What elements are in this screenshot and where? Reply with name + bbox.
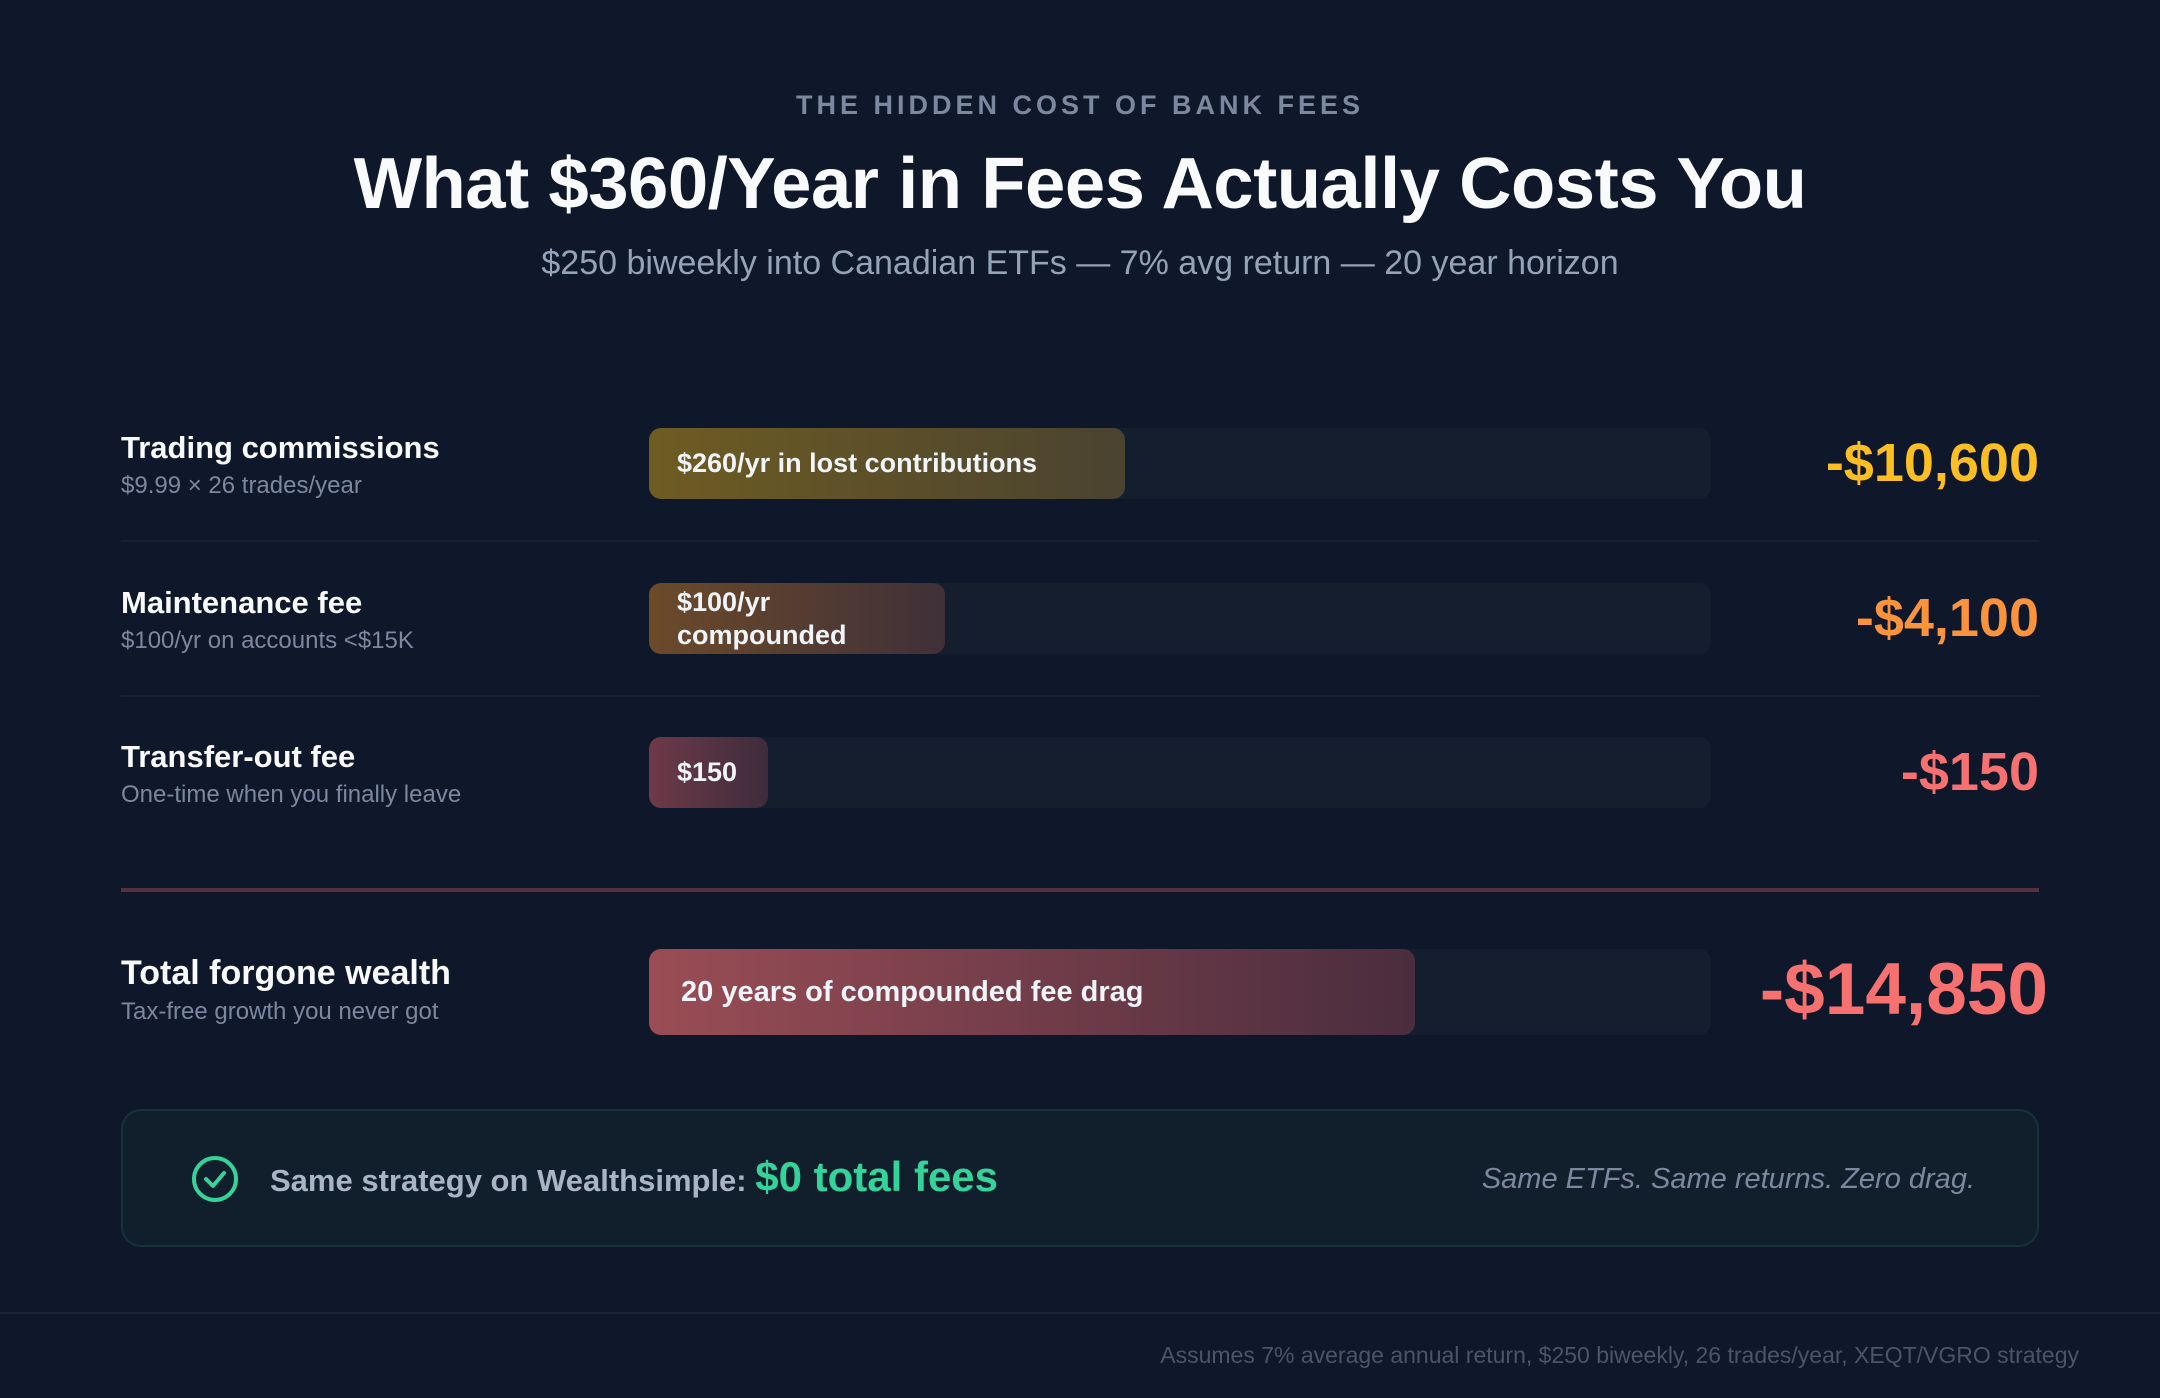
label: Transfer-out fee xyxy=(121,739,355,774)
callout: wealthsimple xyxy=(121,1109,2039,1247)
bar xyxy=(649,583,1711,654)
bar: compounded xyxy=(677,620,846,650)
callout text: Same strategy on Wealthsimple: $0 total fees xyxy=(270,1153,998,1200)
value: -$4,100 xyxy=(1856,588,2039,648)
row: total xyxy=(121,949,2048,1035)
sublabel: One-time when you finally leave xyxy=(121,781,461,808)
bar: $100/yr xyxy=(677,587,770,617)
sublabel: $100/yr on accounts <$15K xyxy=(121,627,414,654)
value: -$14,850 xyxy=(1760,949,2048,1030)
title: What $360/Year in Fees Actually Costs You xyxy=(354,143,1806,224)
tagline: Same ETFs. Same returns. Zero drag. xyxy=(1482,1163,1975,1195)
value: -$10,600 xyxy=(1826,433,2039,493)
sublabel: $9.99 × 26 trades/year xyxy=(121,472,362,499)
label: Total forgone wealth xyxy=(121,954,451,992)
label: Trading commissions xyxy=(121,430,440,465)
footnote: Assumes 7% average annual return, $250 biweekly, 26 trades/year, XEQT/VGRO strategy xyxy=(1160,1342,2079,1368)
subtitle: $250 biweekly into Canadian ETFs — 7% avg return — 20 year horizon xyxy=(541,244,1619,282)
label: Maintenance fee xyxy=(121,585,362,620)
icon: check xyxy=(192,1156,238,1202)
row: trading commissions xyxy=(121,428,2039,499)
sublabel: Tax-free growth you never got xyxy=(121,998,438,1025)
bar: 20 years of compounded fee drag xyxy=(681,976,1144,1008)
row: maintenance fee xyxy=(121,583,2039,654)
bar: $150 xyxy=(677,757,737,787)
eyebrow: THE HIDDEN COST OF BANK FEES xyxy=(796,90,1364,120)
row: transfer-out fee xyxy=(121,737,2039,808)
bar: $260/yr in lost contributions xyxy=(677,448,1037,478)
bar xyxy=(649,737,1711,808)
bar xyxy=(649,949,1711,1035)
bar xyxy=(649,428,1711,499)
value: -$150 xyxy=(1901,742,2039,802)
